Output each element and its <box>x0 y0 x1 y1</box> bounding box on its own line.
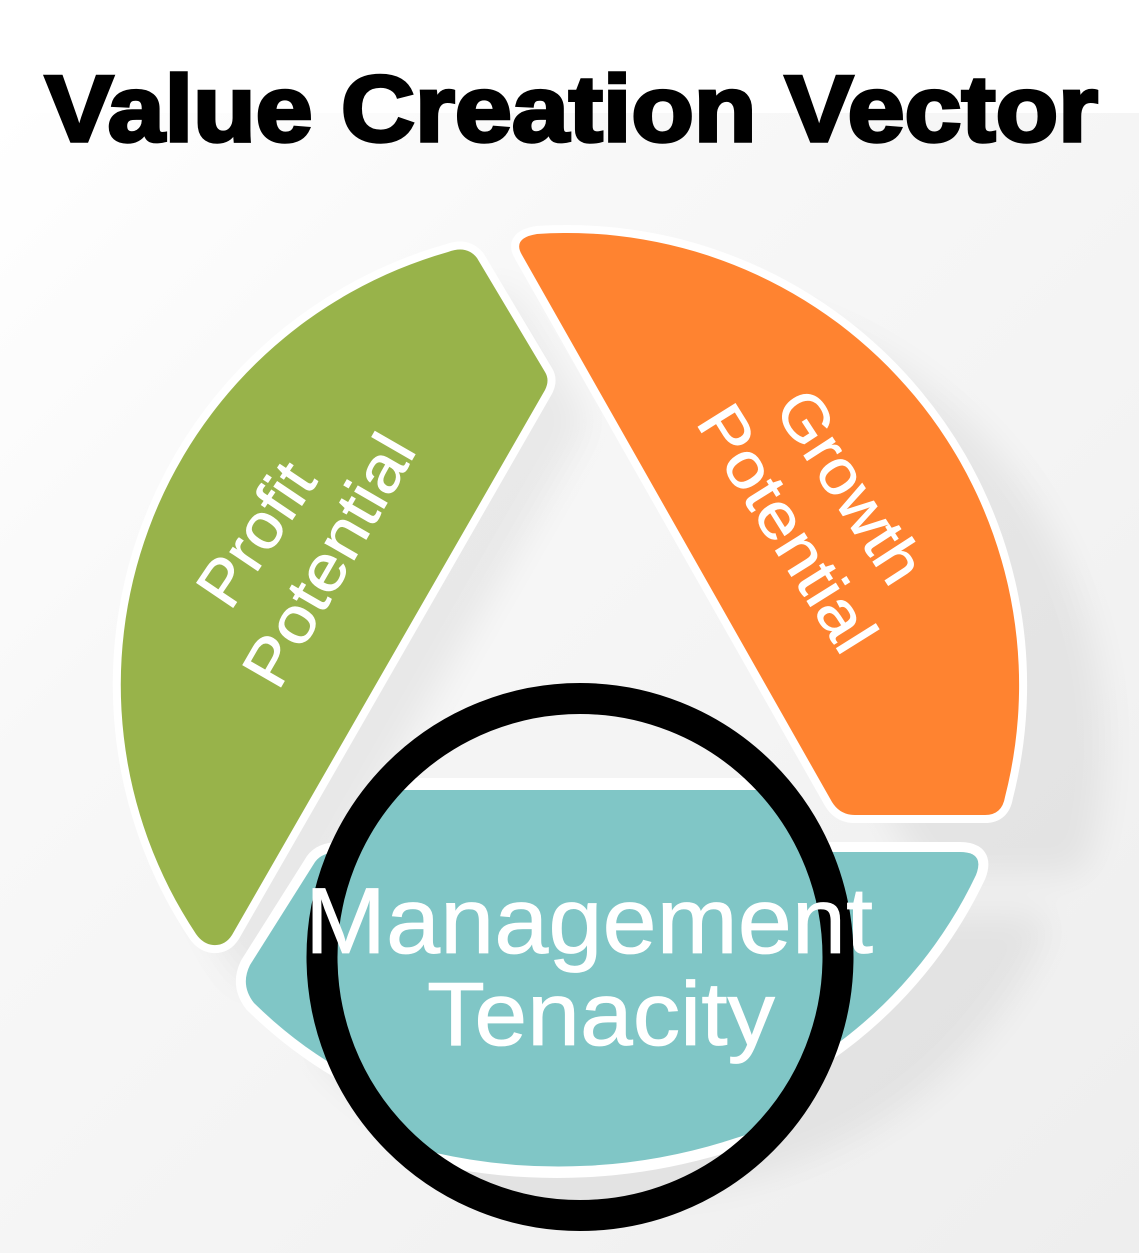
label: profit potential <box>182 421 430 699</box>
segment: management tenacity <box>246 852 978 1132</box>
title: Value Creation Vector <box>45 56 1098 161</box>
label: management tenacity: Tenacity <box>427 965 775 1065</box>
lens ring <box>322 698 838 1216</box>
segment: growth potential <box>519 233 1019 815</box>
label: growth potential <box>683 376 939 665</box>
drop shadows <box>161 290 1104 1192</box>
magnified lens contents <box>361 778 799 1200</box>
label: management tenacity <box>305 868 873 1065</box>
label: growth potential: Growth <box>761 376 939 597</box>
segment: profit potential <box>121 250 547 945</box>
label: growth potential: Potential <box>683 391 892 665</box>
label: profit potential: Profit <box>182 448 330 620</box>
label: profit potential: Potential <box>228 421 430 699</box>
label: management tenacity: Management <box>305 868 873 973</box>
